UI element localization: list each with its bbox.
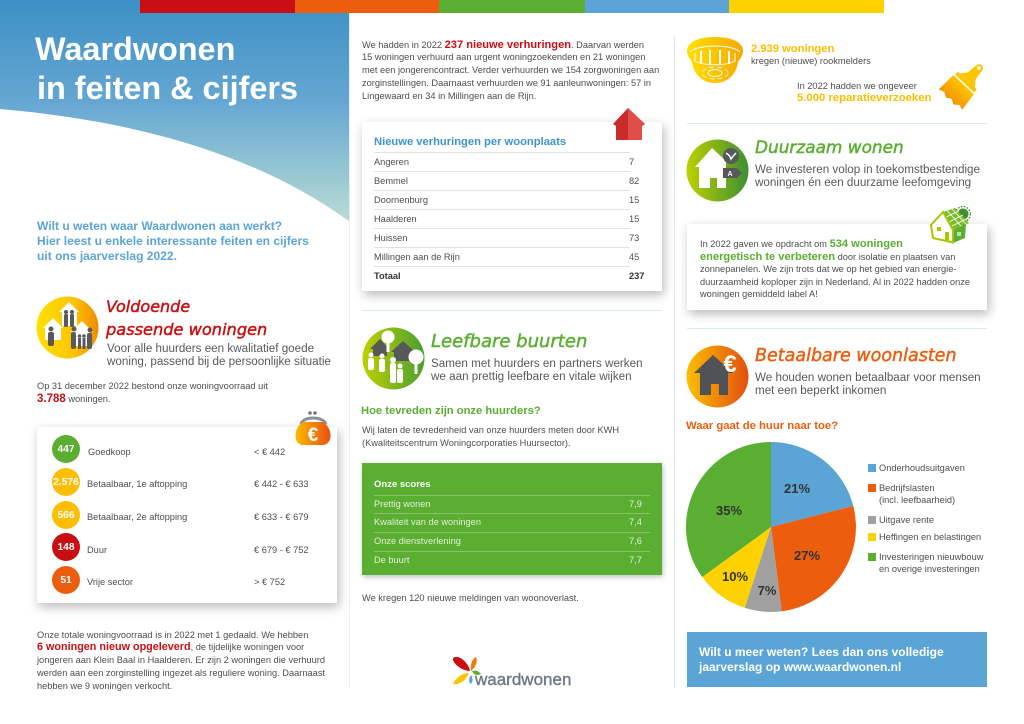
energy text: zonnepanelen. We zijn trots dat we op het gebied van energie- bbox=[700, 264, 956, 274]
energy text: In 2022 gaven we opdracht om 534 woningen bbox=[700, 238, 903, 250]
logo mark bbox=[452, 656, 481, 684]
subheading: We houden wonen betaalbaar voor mensen bbox=[755, 370, 981, 384]
pie chart: 21% bbox=[784, 481, 810, 496]
intro text: uit ons jaarverslag 2022. bbox=[37, 249, 177, 263]
title: in feiten & cijfers bbox=[37, 70, 298, 106]
row: duur: Duur bbox=[87, 545, 107, 555]
pie chart: 7% bbox=[758, 583, 777, 598]
row: goedkoop: Goedkoop bbox=[88, 447, 131, 457]
icon: red house bbox=[613, 108, 645, 140]
intro text: Wilt u weten waar Waardwonen aan werkt? bbox=[37, 219, 282, 233]
table title: Nieuwe verhuringen per woonplaats bbox=[374, 136, 566, 148]
callout: smoke detectors bbox=[751, 43, 871, 66]
bottom text left: jongeren aan Klein Baal in Haalderen. Er zijn 2 woningen die verhuurd bbox=[37, 655, 325, 665]
pie chart: 35% bbox=[716, 503, 742, 518]
text: overlast: We kregen 120 nieuwe meldingen van woonoverlast. bbox=[362, 593, 579, 603]
call to action: Wilt u meer weten? Lees dan ons volledige bbox=[699, 645, 944, 659]
row: betaalbaar 2 bbox=[52, 501, 309, 529]
panel: energy bbox=[687, 224, 987, 310]
scores rows bbox=[374, 495, 650, 565]
text: KWH: (Kwaliteitscentrum Woningcorporaties Huursector). bbox=[362, 438, 571, 448]
logo wordmark: waardwonen bbox=[475, 670, 571, 689]
icon: smoke detector bbox=[687, 37, 743, 83]
bottom text left: 6 woningen nieuw opgeleverd, de tijdelijke woningen voor bbox=[37, 641, 304, 653]
icon: purse bbox=[295, 411, 331, 446]
subheading: Samen met huurders en partners werken bbox=[431, 357, 643, 370]
pie legend: Uitgave rente bbox=[879, 515, 934, 525]
call to action: jaarverslag op www.waardwonen.nl bbox=[699, 660, 901, 674]
pie legend: Bedrijfslasten bbox=[879, 483, 935, 493]
header background with curve bbox=[0, 0, 349, 222]
row: duur bbox=[52, 533, 309, 561]
table rows: Millingen aan de Rijn bbox=[374, 252, 460, 262]
heading: betaalbare woonlasten: Betaalbare woonlasten bbox=[755, 346, 957, 366]
table rows: 15 bbox=[629, 195, 639, 205]
row: betaalbaar 1 bbox=[52, 468, 309, 496]
row: goedkoop: < € 442 bbox=[254, 447, 285, 457]
section heading: Hoe tevreden zijn onze huurders? bbox=[361, 405, 541, 417]
table rows: Totaal bbox=[374, 271, 401, 281]
call to action bbox=[687, 632, 987, 687]
panel: housing stock bbox=[37, 427, 337, 603]
table rows: Huissen bbox=[374, 233, 407, 243]
callout: repairs: 5.000 reparatieverzoeken bbox=[797, 92, 931, 104]
table rows: 73 bbox=[629, 233, 639, 243]
table rows: 7 bbox=[629, 157, 634, 167]
row: betaalbaar 2: 566 bbox=[58, 510, 74, 521]
icon: solar house bbox=[930, 206, 971, 244]
heading: voldoende passende woningen: Voldoende bbox=[106, 297, 190, 316]
table rows bbox=[374, 152, 644, 281]
bottom text left bbox=[36, 630, 325, 691]
subheading bbox=[755, 163, 980, 189]
subheading: We investeren volop in toekomstbestendige bbox=[755, 163, 980, 176]
table rows: 237 bbox=[629, 271, 644, 281]
row: vrije sector bbox=[52, 566, 285, 594]
scores title: Onze scores bbox=[374, 479, 430, 490]
heading: voldoende passende woningen: passende woningen bbox=[106, 320, 267, 339]
pie legend: Heffingen en belastingen bbox=[879, 532, 981, 542]
table rows: Bemmel bbox=[374, 176, 408, 186]
icon: families in houses bbox=[36, 296, 98, 358]
icon: house with euro: € bbox=[723, 351, 737, 378]
subheading: woning, passend bij de persoonlijke situatie bbox=[107, 355, 331, 368]
scores rows: Kwaliteit van de woningen bbox=[374, 517, 481, 527]
subheading bbox=[755, 370, 981, 397]
table rows: Haalderen bbox=[374, 214, 417, 224]
text: new lettings: We hadden in 2022 237 nieuwe verhuringen. Daarvan werden bbox=[362, 38, 644, 50]
row: betaalbaar 1: € 442 - € 633 bbox=[254, 479, 309, 489]
energy text bbox=[700, 238, 970, 299]
callout: repairs bbox=[797, 81, 931, 104]
text: KWH: Wij laten de tevredenheid van onze huurders meten door KWH bbox=[362, 425, 619, 435]
logo bbox=[452, 656, 571, 689]
scores rows: 7,4 bbox=[629, 517, 642, 527]
table rows: 15 bbox=[629, 214, 639, 224]
text: new lettings: 15 woningen verhuurd aan urgent woningzoekenden en 21 woningen bbox=[362, 52, 645, 62]
subheading: we aan prettig leefbare en vitale wijken bbox=[431, 370, 632, 383]
callout: smoke detectors: 2.939 woningen bbox=[751, 43, 834, 55]
row: vrije sector: 51 bbox=[60, 575, 72, 586]
icon: sustainable house bbox=[686, 140, 748, 202]
pie chart: 10% bbox=[722, 569, 748, 584]
callout: repairs: In 2022 hadden we ongeveer bbox=[797, 81, 917, 91]
energy text: woningen gemiddeld label A! bbox=[700, 289, 818, 299]
scores rows: Onze dienstverlening bbox=[374, 536, 461, 546]
bottom text left: hebben we 9 woningen verkocht. bbox=[37, 681, 172, 691]
stock text: Op 31 december 2022 bestond onze woningvoorraad uit bbox=[37, 380, 268, 390]
callout: smoke detectors: kregen (nieuwe) rookmelders bbox=[751, 56, 871, 66]
icon: purse: € bbox=[308, 425, 319, 446]
subheading bbox=[107, 342, 331, 368]
intro text bbox=[37, 219, 309, 263]
row: goedkoop: 447 bbox=[58, 444, 74, 455]
pie legend: en overige investeringen bbox=[879, 564, 980, 574]
bottom text left: werden aan een zorginstelling ingezet als reguliere woning. Daarnaast bbox=[37, 668, 325, 678]
energy text: duurzaamheid koploper zijn in Nederland. Al in 2022 hadden onze bbox=[700, 277, 970, 287]
text: new lettings bbox=[362, 38, 659, 101]
subheading: woningen én een duurzame leefomgeving bbox=[755, 176, 971, 189]
row: vrije sector: > € 752 bbox=[254, 577, 285, 587]
scores rows: De buurt bbox=[374, 555, 409, 565]
stock text bbox=[37, 380, 268, 404]
pie legend: (incl. leefbaarheid) bbox=[879, 495, 955, 505]
row: vrije sector: Vrije sector bbox=[87, 577, 133, 587]
scores rows: Prettig wonen bbox=[374, 499, 431, 509]
pie chart bbox=[686, 442, 856, 612]
energy text: energetisch te verbeteren door isolatie en plaatsen van bbox=[700, 251, 955, 263]
bottom text left: Onze totale woningvoorraad is in 2022 met 1 gedaald. We hebben bbox=[37, 630, 308, 640]
table rows: Doornenburg bbox=[374, 195, 428, 205]
row: betaalbaar 2: Betaalbaar, 2e aftopping bbox=[87, 512, 187, 522]
subheading: Voor alle huurders een kwalitatief goede bbox=[107, 342, 314, 355]
row: betaalbaar 2: € 633 - € 679 bbox=[254, 512, 309, 522]
icon: house with euro bbox=[686, 346, 748, 408]
scores rows: 7,9 bbox=[629, 499, 642, 509]
pie legend: Investeringen nieuwbouw bbox=[879, 552, 983, 562]
scores rows: 7,6 bbox=[629, 536, 642, 546]
heading: duurzaam wonen: Duurzaam wonen bbox=[755, 137, 904, 157]
subheading bbox=[431, 357, 643, 383]
stock text: 3.788 woningen. bbox=[37, 392, 111, 404]
intro text: Hier leest u enkele interessante feiten en cijfers bbox=[37, 234, 309, 248]
colour bar bbox=[140, 0, 884, 13]
pie legend: Onderhoudsuitgaven bbox=[879, 463, 965, 473]
icon: paint brush bbox=[938, 64, 983, 110]
pie legend bbox=[868, 463, 984, 574]
row: betaalbaar 1: 2.576 bbox=[53, 477, 79, 488]
scores rows: 7,7 bbox=[629, 555, 642, 565]
text: KWH bbox=[362, 425, 619, 448]
heading: voldoende passende woningen bbox=[106, 297, 267, 339]
row: duur: € 679 - € 752 bbox=[254, 545, 309, 555]
row: betaalbaar 1: Betaalbaar, 1e aftopping bbox=[87, 479, 187, 489]
table rows: 45 bbox=[629, 252, 639, 262]
heading: leefbare buurten: Leefbare buurten bbox=[431, 331, 587, 352]
panel: lettings table bbox=[362, 122, 662, 291]
table rows: 82 bbox=[629, 176, 639, 186]
icon: sustainable house: A bbox=[727, 171, 733, 178]
panel: scores bbox=[362, 463, 662, 575]
row: goedkoop bbox=[52, 435, 285, 463]
icon: neighbourhood bbox=[362, 328, 424, 390]
subheading: met een beperkt inkomen bbox=[755, 384, 886, 397]
row: duur: 148 bbox=[58, 542, 74, 553]
text: new lettings: Lingewaard en 34 in Millingen aan de Rijn. bbox=[362, 91, 536, 101]
text: new lettings: met een jongerencontract. Verder verhuurden we 154 zorgwoningen aan bbox=[362, 65, 659, 75]
title: Waardwonen bbox=[35, 31, 235, 67]
title bbox=[35, 31, 298, 106]
table rows: Angeren bbox=[374, 157, 409, 167]
pie chart: 27% bbox=[794, 548, 820, 563]
section heading: Waar gaat de huur naar toe? bbox=[686, 420, 838, 432]
text: new lettings: zorginstellingen. Daarnaast verhuurden we 91 aanleunwoningen: 57 in bbox=[362, 78, 651, 88]
